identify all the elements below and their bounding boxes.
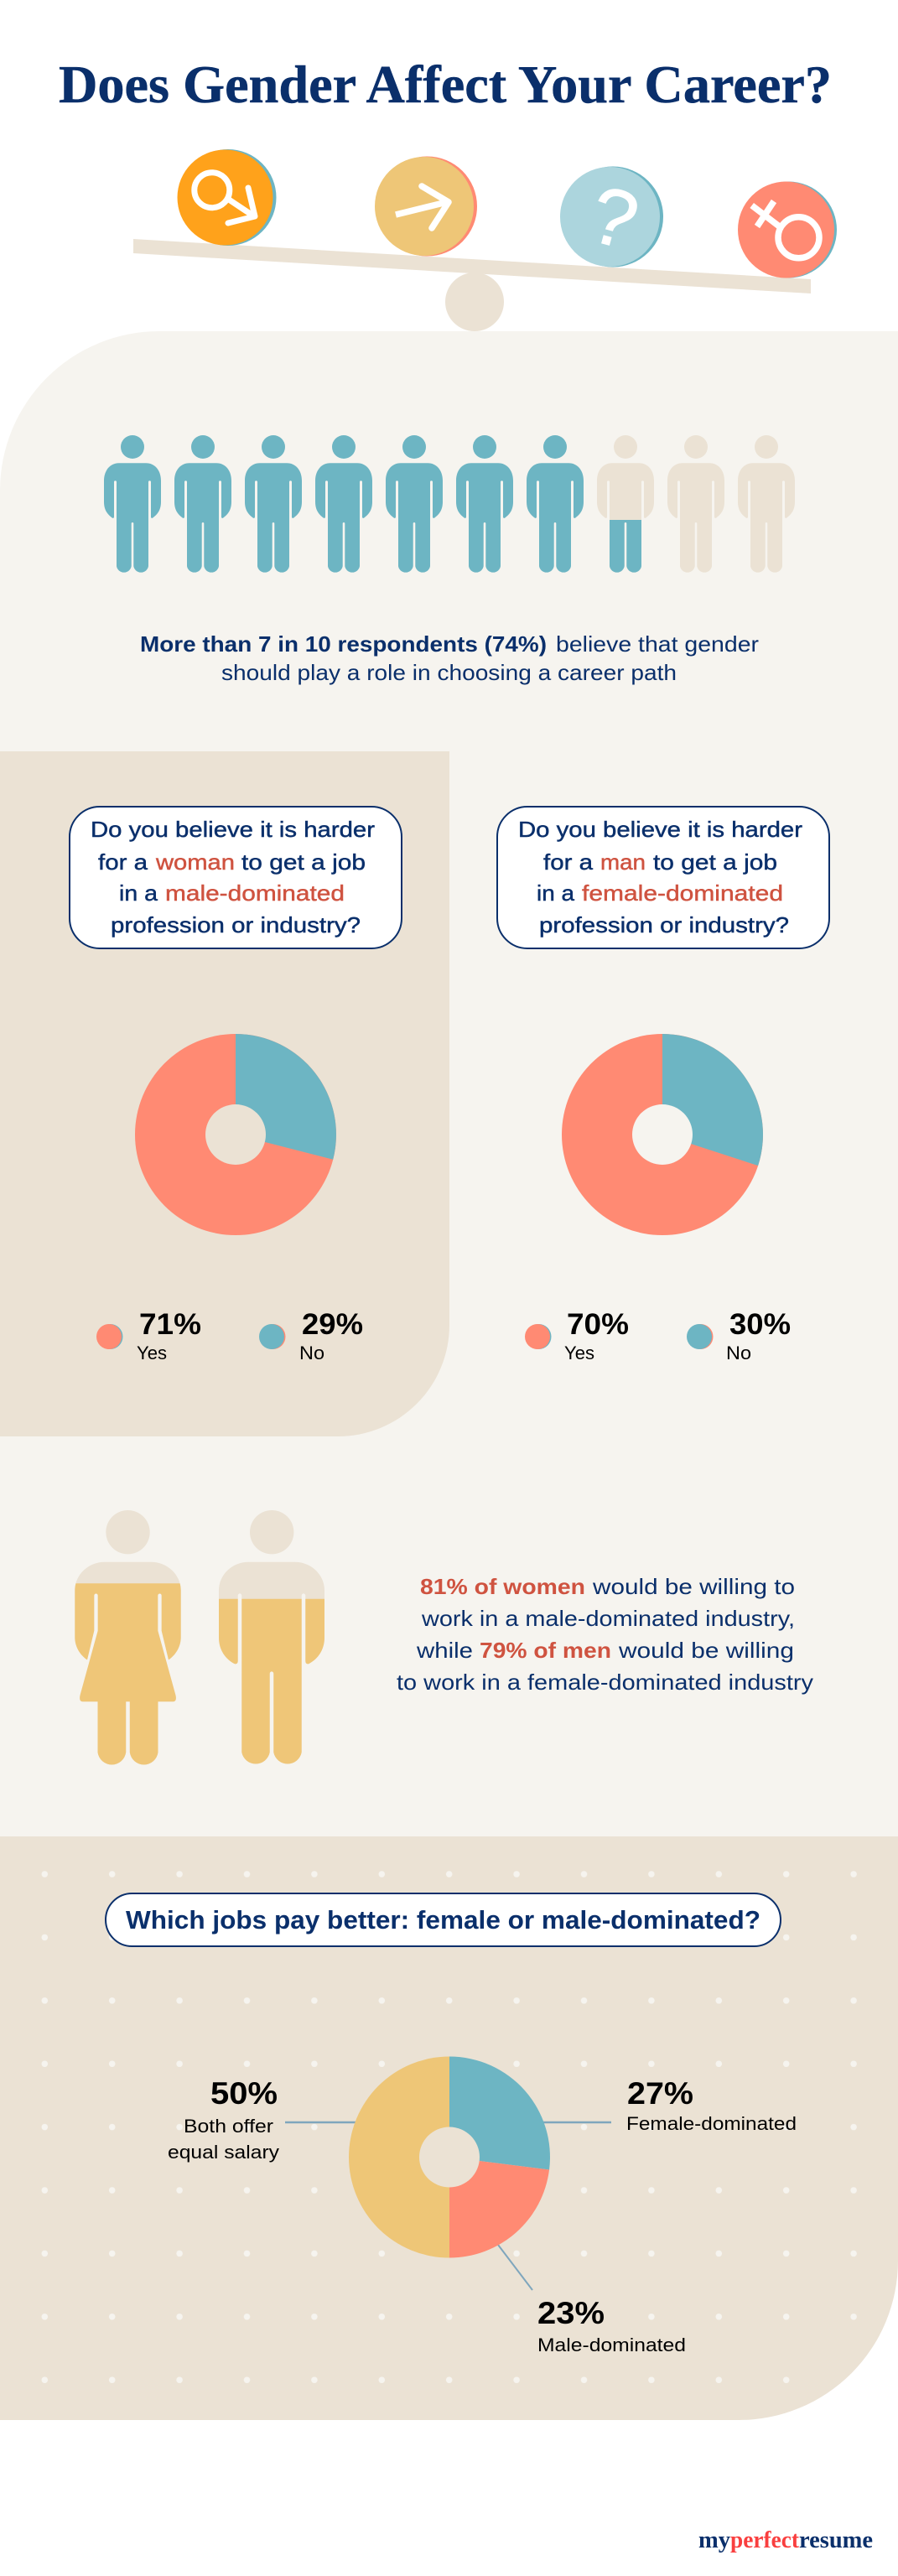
callout: man question: man [600,849,646,875]
icon: man figure 79% [219,1510,324,1764]
chart: woman pie 71/29 [135,1034,336,1235]
title: Does Gender Affect Your Career? [59,55,832,114]
legend: woman pie: Yes [137,1343,167,1363]
text: willingness statistic: 79% of men [480,1638,611,1663]
callout: woman question [70,807,402,948]
icon: female symbol disc [738,181,837,278]
legend: woman pie: 29% [302,1308,363,1341]
text: 74% statistic: More than 7 in 10 respondents (74%) [140,631,547,657]
callout: man question: for a [543,849,594,875]
legend: man pie: 70% [567,1308,629,1341]
icon: male symbol disc [178,149,277,246]
text: 74% statistic [140,631,759,685]
callout: man question: Do you believe it is harder [518,817,802,842]
label: 23% male-dominated [537,2296,686,2355]
callout: man question: profession or industry? [539,912,789,937]
text: willingness statistic: work in a male-dominated industry, [421,1606,795,1631]
callout: man question: to get a job [653,849,777,875]
label: 23% male-dominated: 23% [537,2296,605,2330]
leader lines [285,2122,611,2290]
text: willingness statistic [397,1574,813,1695]
chart: man pie 70/30 [562,1034,763,1235]
legend: woman pie: 71% [139,1308,201,1341]
label: 50% both: Both offer [184,2116,273,2137]
text: willingness statistic: would be willing to [592,1574,795,1599]
logo: myperfectresume: my [698,2527,730,2553]
label: 50% both: equal salary [168,2142,279,2163]
icon: seesaw beam [133,239,811,293]
icon: question mark disc: ? [580,169,647,267]
callout: woman question: in a [119,880,158,906]
illustration: balance scale with symbols [133,149,837,331]
panel: woman question [0,751,449,1436]
callout: man question: in a [537,880,575,906]
legend: man pie: No [726,1343,751,1363]
heading: salary question pill: Which jobs pay better: female or male-dominated? [126,1905,760,1935]
icon: arrow disc [375,156,477,257]
callout: woman question: for a [98,849,148,875]
label: 27% female-dominated [626,2076,797,2134]
text: 74% statistic: believe that gender [556,631,759,657]
logo: myperfectresume: resume [799,2527,873,2553]
legend: man pie: Yes [564,1343,594,1363]
logo: myperfectresume [698,2527,873,2553]
text: willingness statistic: 81% of women [420,1574,585,1599]
callout: woman question: woman [155,849,235,875]
callout: woman question: male-dominated [165,880,345,906]
callout: woman question: to get a job [241,849,366,875]
panel: light background [0,331,898,1845]
callout: man question [497,807,829,948]
text: willingness statistic: would be willing [618,1638,794,1663]
legend: man pie [525,1308,791,1363]
text: 74% statistic: should play a role in choosing a career path [221,660,677,685]
pictogram: 7.4 of 10 people [104,435,795,573]
legend: man pie: 30% [729,1308,791,1341]
icon: question mark disc [560,166,663,267]
text: willingness statistic: while [416,1638,473,1663]
text: willingness statistic: to work in a female-dominated industry [397,1670,813,1695]
callout: man question: female-dominated [582,880,783,906]
chart: salary pie 50/27/23 [349,2056,550,2257]
panel: salary section [0,1836,898,2420]
logo: myperfectresume: perfect [730,2527,800,2553]
callout: woman question: Do you believe it is harder [91,817,375,842]
label: 50% both [168,2076,279,2163]
label: 50% both: 50% [210,2076,278,2111]
icon: woman figure 81% [75,1510,181,1764]
label: 23% male-dominated: Male-dominated [537,2334,686,2355]
heading: salary question pill [106,1893,781,1946]
legend: woman pie [96,1308,363,1363]
icon: fulcrum [445,273,504,331]
label: 27% female-dominated: Female-dominated [626,2113,797,2134]
legend: woman pie: No [299,1343,324,1363]
callout: woman question: profession or industry? [111,912,361,937]
label: 27% female-dominated: 27% [627,2076,693,2111]
